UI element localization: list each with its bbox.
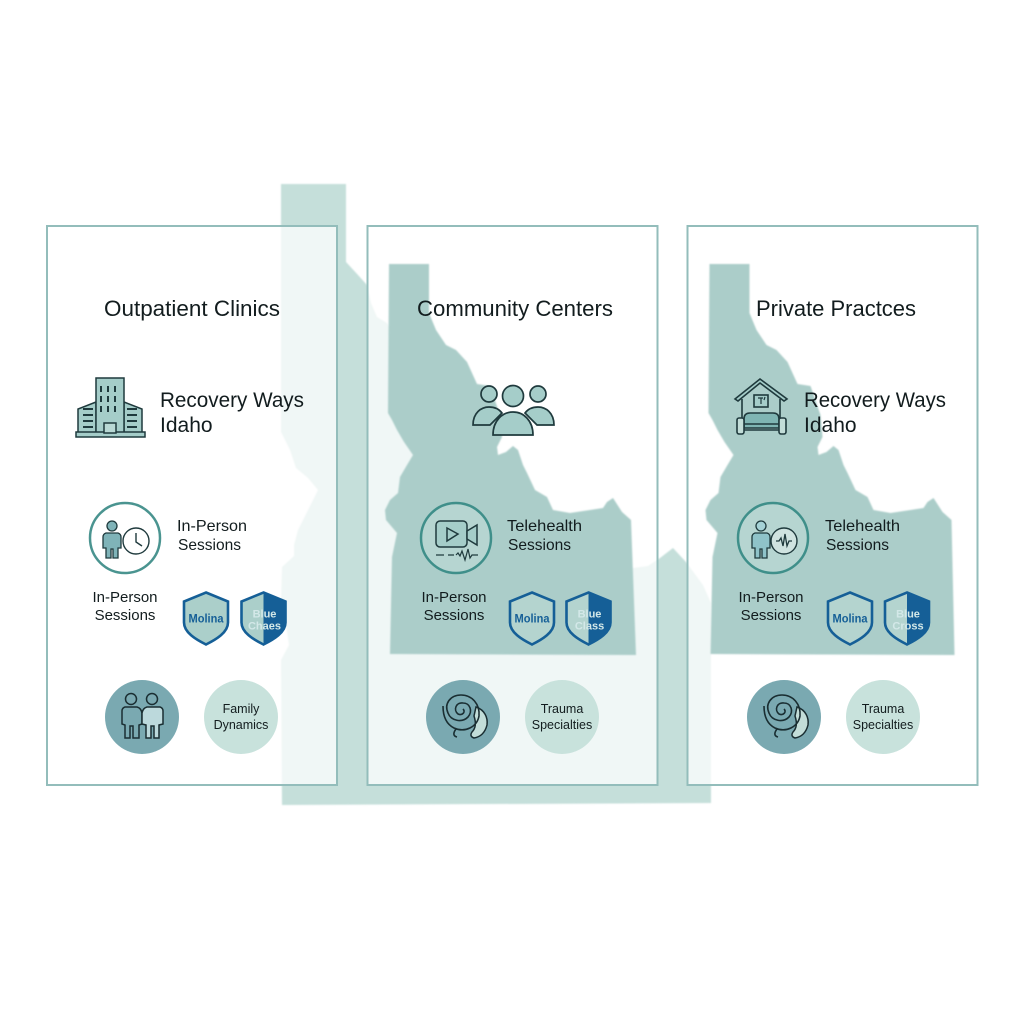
heading: private practices: Private Practces (756, 296, 916, 321)
badge: trauma specialties: Specialties (532, 718, 592, 732)
insurance shield: Blue Cross: Cross (892, 620, 924, 632)
insurance shield: Molina: Molina (188, 612, 224, 626)
panel: outpatient clinics (47, 226, 337, 785)
Idaho map: community centers (385, 264, 636, 655)
Idaho map: private practices (706, 264, 954, 655)
insurance shield: Molina (510, 592, 554, 644)
badge: family dynamics: Dynamics (214, 718, 268, 732)
insurance shield: Blue Cross: Blue (896, 608, 920, 620)
label: in-person sessions lower: In-Person (738, 589, 804, 606)
provider name: Recovery Ways (804, 389, 946, 412)
insurance shield: Blue Chaes: Chaes (248, 620, 281, 632)
insurance shield: Molina: Molina (514, 612, 550, 626)
insurance shield: Blue Cross (885, 592, 929, 644)
icon: two people (105, 680, 179, 754)
insurance shield: Blue Class: Class (575, 620, 604, 632)
label: in-person sessions lower: Sessions (424, 607, 484, 624)
label: in-person sessions lower: Sessions (741, 607, 801, 624)
label: in-person sessions: In-Person (177, 518, 247, 535)
provider name: Idaho (160, 414, 213, 437)
panel: community centers (368, 226, 658, 785)
label: in-person sessions: Sessions (178, 537, 241, 554)
insurance shield: Molina (828, 592, 872, 644)
large Idaho map backdrop (281, 184, 711, 805)
provider name: Idaho (804, 414, 857, 437)
insurance shield: Blue Class (566, 592, 610, 644)
label: in-person sessions lower: In-Person (92, 589, 158, 606)
label: in-person sessions lower: In-Person (421, 589, 487, 606)
icon: office building (76, 378, 145, 437)
badge: trauma specialties: Trauma (541, 702, 583, 716)
provider name: Recovery Ways (160, 389, 304, 412)
label: telehealth sessions: Sessions (508, 537, 571, 554)
label: telehealth sessions: Telehealth (825, 518, 900, 535)
badge: trauma specialties (525, 680, 599, 754)
icon: trauma spiral (426, 680, 500, 754)
icon: video camera (421, 503, 491, 573)
icon: person with pulse (738, 503, 808, 573)
badge: trauma specialties: Specialties (853, 718, 913, 732)
icon: person with clock (90, 503, 160, 573)
icon: trauma spiral (747, 680, 821, 754)
insurance shield: Blue Chaes: Blue (253, 608, 276, 620)
badge: family dynamics: Family (223, 702, 260, 716)
insurance shield: Molina (184, 592, 228, 644)
insurance shield: Blue Chaes (242, 592, 286, 644)
icon: house with couch (735, 379, 787, 434)
badge: family dynamics (204, 680, 278, 754)
label: in-person sessions lower: Sessions (95, 607, 155, 624)
panel: private practices (688, 226, 978, 785)
insurance shield: Molina: Molina (832, 612, 868, 626)
heading: outpatient clinics: Outpatient Clinics (104, 296, 280, 321)
label: telehealth sessions: Telehealth (507, 518, 582, 535)
badge: trauma specialties: Trauma (862, 702, 904, 716)
icon: group of people (473, 386, 554, 435)
insurance shield: Blue Class: Blue (578, 608, 601, 620)
heading: community centers: Community Centers (417, 296, 613, 321)
label: telehealth sessions: Sessions (826, 537, 889, 554)
badge: trauma specialties (846, 680, 920, 754)
